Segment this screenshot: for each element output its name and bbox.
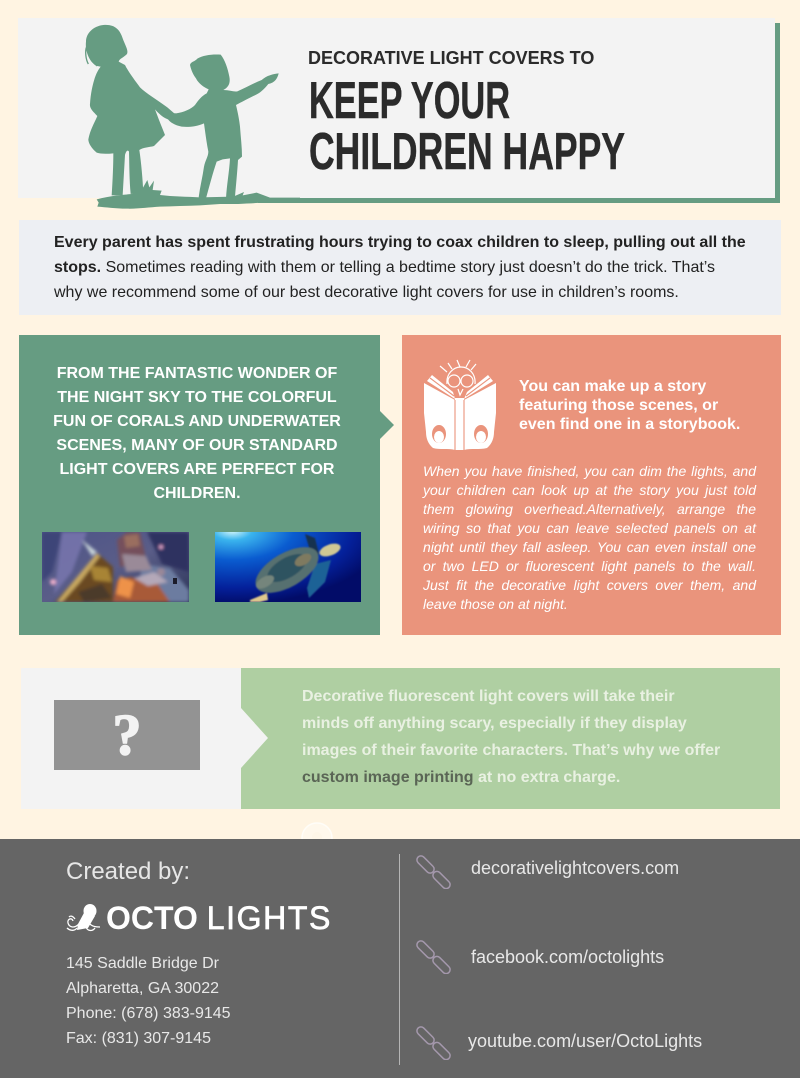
panel text [302, 688, 720, 786]
link row: facebook [416, 940, 664, 974]
panel text: Decorative fluorescent light covers will take their [302, 688, 675, 705]
arrow pointer [241, 708, 268, 768]
faint badge icon [301, 822, 333, 839]
panel background [19, 335, 380, 635]
header panel [18, 18, 780, 203]
panel text: custom image printing at no extra charge. [302, 769, 620, 786]
header background [18, 18, 775, 198]
panel text: SCENES, MANY OF OUR STANDARD [56, 437, 338, 454]
created by label: Created by: [66, 858, 190, 885]
panel heading: featuring those scenes, or [519, 397, 718, 414]
panel: night sky and corals [19, 335, 394, 635]
panel: make up a story [402, 335, 781, 635]
panel italic text: When you have finished, you can dim the lights, and [423, 463, 756, 479]
panel text [53, 365, 341, 502]
vertical divider [399, 854, 400, 1065]
image: sea turtle [215, 532, 361, 602]
arrow pointer [380, 411, 394, 439]
panel text: CHILDREN. [153, 485, 241, 502]
icon: question mark: ? [112, 702, 142, 767]
panel text: LIGHT COVERS ARE PERFECT FOR [60, 461, 334, 478]
link text: decorativelightcovers.com [471, 858, 679, 878]
address: Fax: (831) 307-9145 [66, 1030, 211, 1047]
main title: KEEP YOUR [309, 72, 510, 130]
intro text block [19, 220, 781, 315]
intro text block: stops. Sometimes reading with them or telling a bedtime story just doesn’t do the trick. That’s [54, 259, 715, 276]
panel text: FUN OF CORALS AND UNDERWATER [53, 413, 341, 430]
header bottom border [258, 198, 780, 203]
icon: child reading book [424, 360, 496, 450]
icon: question mark [54, 700, 200, 770]
panel italic text: your children can look up at the story you just told [423, 482, 756, 498]
icon: octopus [66, 904, 100, 932]
panel: custom image printing [21, 668, 780, 809]
panel italic text: Just fit the decorative light covers over them, and [423, 577, 756, 593]
intro text block: why we recommend some of our best decorative light covers for use in children’s rooms. [54, 284, 679, 301]
panel italic text: them glowing overhead.Alternatively, arrange the [423, 501, 756, 517]
right green area [241, 668, 780, 809]
icon: chain link [416, 1026, 451, 1060]
logo wordmark: OCTO LIGHTS [106, 900, 332, 936]
header right border [775, 23, 780, 203]
left grey area [21, 668, 241, 809]
panel text: images of their favorite characters. That’s why we offer [302, 742, 720, 759]
panel heading [519, 378, 740, 433]
link row: youtube [416, 1026, 702, 1060]
link text: facebook.com/octolights [471, 947, 664, 967]
panel heading: You can make up a story [519, 378, 706, 395]
image: nebula [42, 532, 189, 602]
panel italic text [422, 463, 756, 612]
address [66, 955, 231, 1047]
footer [0, 839, 800, 1078]
address: Alpharetta, GA 30022 [66, 980, 219, 997]
logo: Octo Lights [66, 900, 332, 936]
panel heading: even find one in a storybook. [519, 416, 740, 433]
panel italic text: or two LED or fluorescent light panels to the wall. [423, 558, 756, 574]
panel text: THE NIGHT SKY TO THE COLORFUL [57, 389, 337, 406]
illustration: children silhouette [85, 24, 300, 209]
address: Phone: (678) 383-9145 [66, 1005, 231, 1022]
link row: website [416, 855, 679, 889]
panel italic text: night until they fall asleep. You can even install one [423, 539, 756, 555]
subtitle: DECORATIVE LIGHT COVERS TO [308, 48, 594, 68]
icon: chain link [416, 940, 451, 974]
address: 145 Saddle Bridge Dr [66, 955, 219, 972]
panel italic text: leave those on at night. [423, 596, 568, 612]
intro text block: Every parent has spent frustrating hours trying to coax children to sleep, pulling out all the [54, 234, 746, 251]
panel text: minds off anything scary, especially if they display [302, 715, 687, 732]
link text: youtube.com/user/OctoLights [468, 1031, 702, 1051]
icon: chain link [416, 855, 451, 889]
main title [309, 72, 625, 180]
panel text: FROM THE FANTASTIC WONDER OF [57, 365, 337, 382]
panel italic text: wiring so that you can leave selected panels on at [423, 520, 756, 536]
